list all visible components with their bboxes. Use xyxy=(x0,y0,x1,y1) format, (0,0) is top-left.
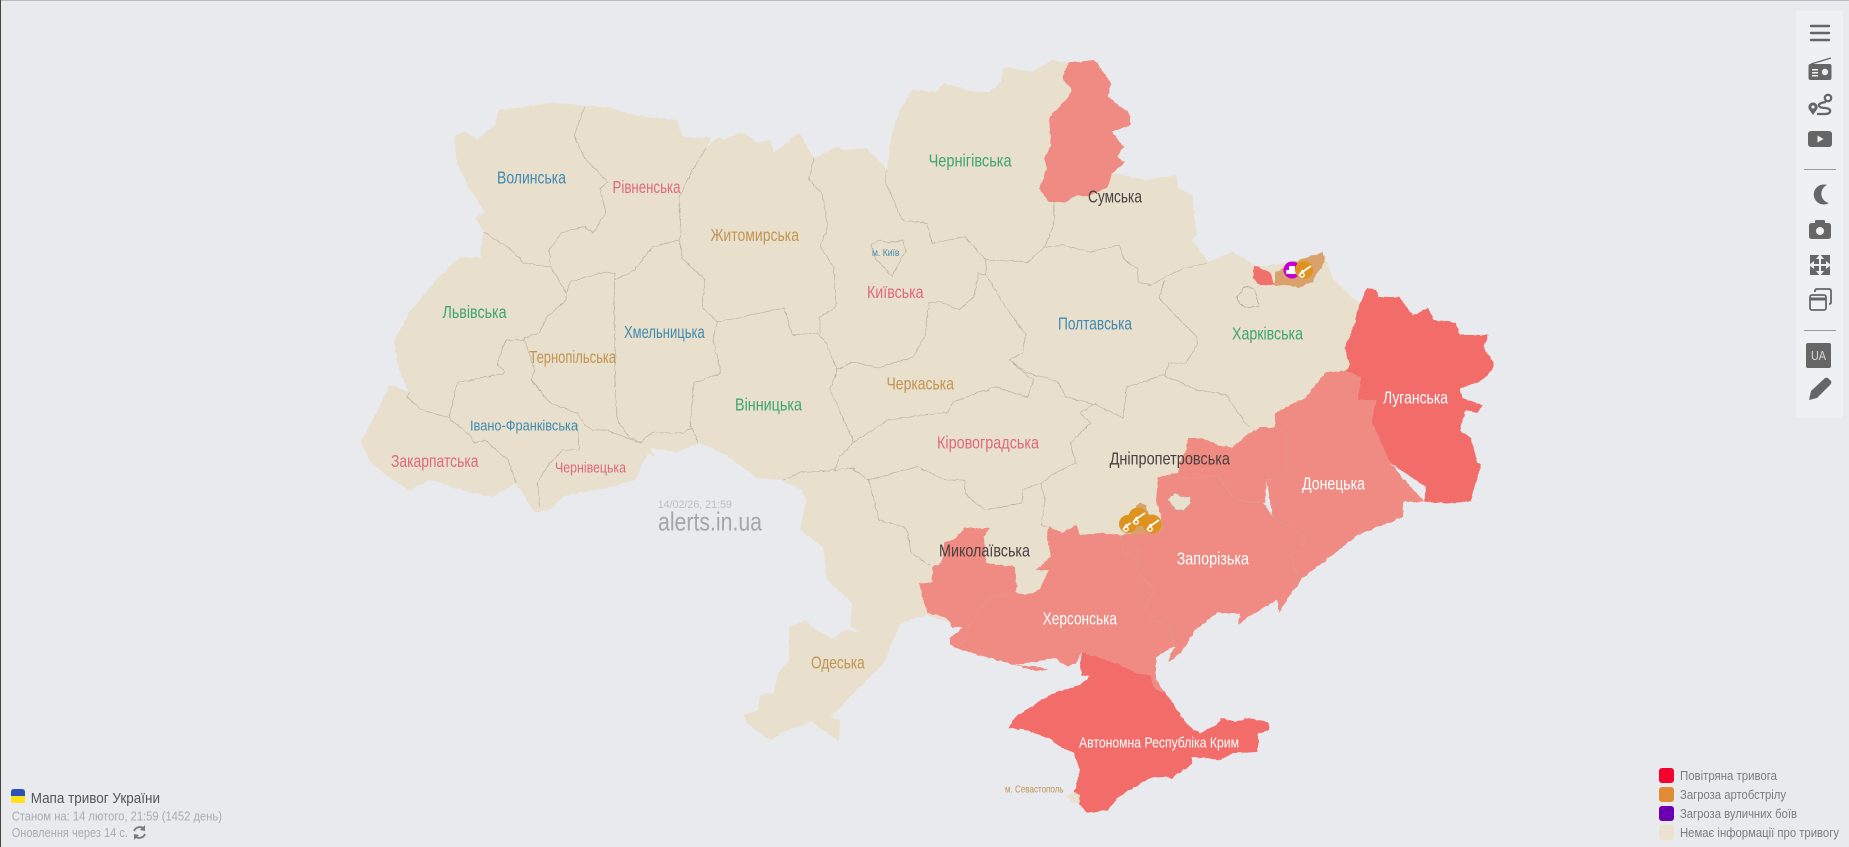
label: Kyiv city: м. Київ xyxy=(872,247,900,259)
label: Kyivska: Київська xyxy=(867,282,924,302)
label: Ternopilska: Тернопільська xyxy=(529,347,616,367)
label: Khmelnytska: Хмельницька xyxy=(624,322,705,342)
icon: artillery marker Kharkivska xyxy=(1295,261,1313,279)
legend xyxy=(1659,768,1840,840)
Sevastopol xyxy=(1066,793,1080,803)
icon: menu xyxy=(1811,26,1829,40)
update countdown: Оновлення через 14 с. xyxy=(12,825,128,840)
icon: fullscreen xyxy=(1809,254,1831,276)
region: Zaporizka xyxy=(1120,475,1305,663)
footer info xyxy=(11,789,222,840)
icon: refresh xyxy=(134,825,145,840)
region: Crimea xyxy=(1009,652,1269,813)
icon: artillery marker 2 Dnipropetrovska xyxy=(1128,508,1148,526)
region: Khersonska xyxy=(957,525,1173,693)
icon: artillery marker 3 Dnipropetrovska xyxy=(1142,514,1162,534)
label: Kirovohradska: Кіровоградська xyxy=(937,432,1039,452)
Kyiv city xyxy=(871,240,906,277)
Dnipropetrovska artillery zone xyxy=(1130,503,1164,535)
label: Zhytomyrska: Житомирська xyxy=(710,225,799,245)
button: language UA: UA xyxy=(1811,348,1826,363)
legend: air alert: Повітряна тривога xyxy=(1680,769,1777,783)
label: Mykolaivska: Миколаївська xyxy=(939,540,1030,560)
label: Dnipropetrovska: Дніпропетровська xyxy=(1110,448,1230,468)
label: Zakarpatska: Закарпатська xyxy=(391,451,479,471)
label: Sumska: Сумська xyxy=(1088,186,1142,206)
region: Mykolaivska red part xyxy=(919,528,1017,648)
icon: camera xyxy=(1809,220,1831,239)
icon: radio xyxy=(1808,58,1832,80)
icon: pencil xyxy=(1809,378,1831,400)
label: Poltavska: Полтавська xyxy=(1058,314,1132,334)
label: Khersonska: Херсонська xyxy=(1043,608,1117,628)
legend: street fighting: Загроза вуличних боїв xyxy=(1680,807,1797,821)
label: Odeska: Одеська xyxy=(811,652,865,672)
icon: Ukrainian flag xyxy=(11,789,25,803)
icon: street fighting marker xyxy=(1284,262,1300,278)
label: Donetska: Донецька xyxy=(1302,474,1365,494)
region: Luhanska xyxy=(1345,288,1493,503)
label: Sevastopol: м. Севастополь xyxy=(1005,784,1064,796)
Kharkiv city xyxy=(1237,287,1259,307)
region: Kharkivska artillery zone xyxy=(1275,252,1325,288)
label: Chernivetska: Чернівецька xyxy=(555,460,627,476)
toolbar panel xyxy=(1796,11,1843,418)
status date: Станом на: 14 лютого, 21:59 (1452 день) xyxy=(12,808,222,824)
watermark date: 14/02/26, 21:59 xyxy=(658,499,732,511)
icon: windows xyxy=(1810,289,1831,310)
label: Ivano-Frankivska: Івано-Франківська xyxy=(470,418,579,434)
icon: video xyxy=(1808,131,1832,147)
icon: moon xyxy=(1814,184,1829,204)
icon: artillery marker 1 Dnipropetrovska xyxy=(1119,515,1137,533)
label: Zaporizka: Запорізька xyxy=(1177,548,1249,568)
legend: artillery: Загроза артобстрілу xyxy=(1680,788,1787,802)
oblast borders xyxy=(407,106,1249,565)
region labels xyxy=(391,150,1448,796)
region: Donetska xyxy=(1266,370,1424,595)
label: Volynska: Волинська xyxy=(497,168,566,188)
label: Vinnytska: Вінницька xyxy=(735,394,802,414)
label: Crimea: Автономна Республіка Крим xyxy=(1079,734,1239,752)
button: language UA xyxy=(1806,343,1831,368)
borders inside alert regions xyxy=(967,433,1305,647)
region: Dnipropetrovska red part xyxy=(1158,427,1287,503)
label: Luhanska: Луганська xyxy=(1383,388,1448,408)
icon: route xyxy=(1808,95,1831,115)
region: Sumska north alert xyxy=(1039,60,1131,202)
label: Rivnenska: Рівненська xyxy=(612,177,681,197)
base: oblasts with no alert xyxy=(361,60,1359,742)
region: Kharkivska red fragment xyxy=(1253,265,1275,285)
region: Tendra spit xyxy=(1015,665,1048,671)
label: Lvivska: Львівська xyxy=(442,302,507,322)
watermark site name: alerts.in.ua xyxy=(658,506,762,536)
map of Ukraine xyxy=(361,60,1493,813)
label: Kharkivska: Харківська xyxy=(1232,324,1303,344)
title: Мапа тривог України xyxy=(31,790,160,807)
Zaporizhzhia city xyxy=(1168,493,1191,510)
label: Chernihivska: Чернігівська xyxy=(929,150,1012,170)
label: Cherkaska: Черкаська xyxy=(886,374,954,394)
